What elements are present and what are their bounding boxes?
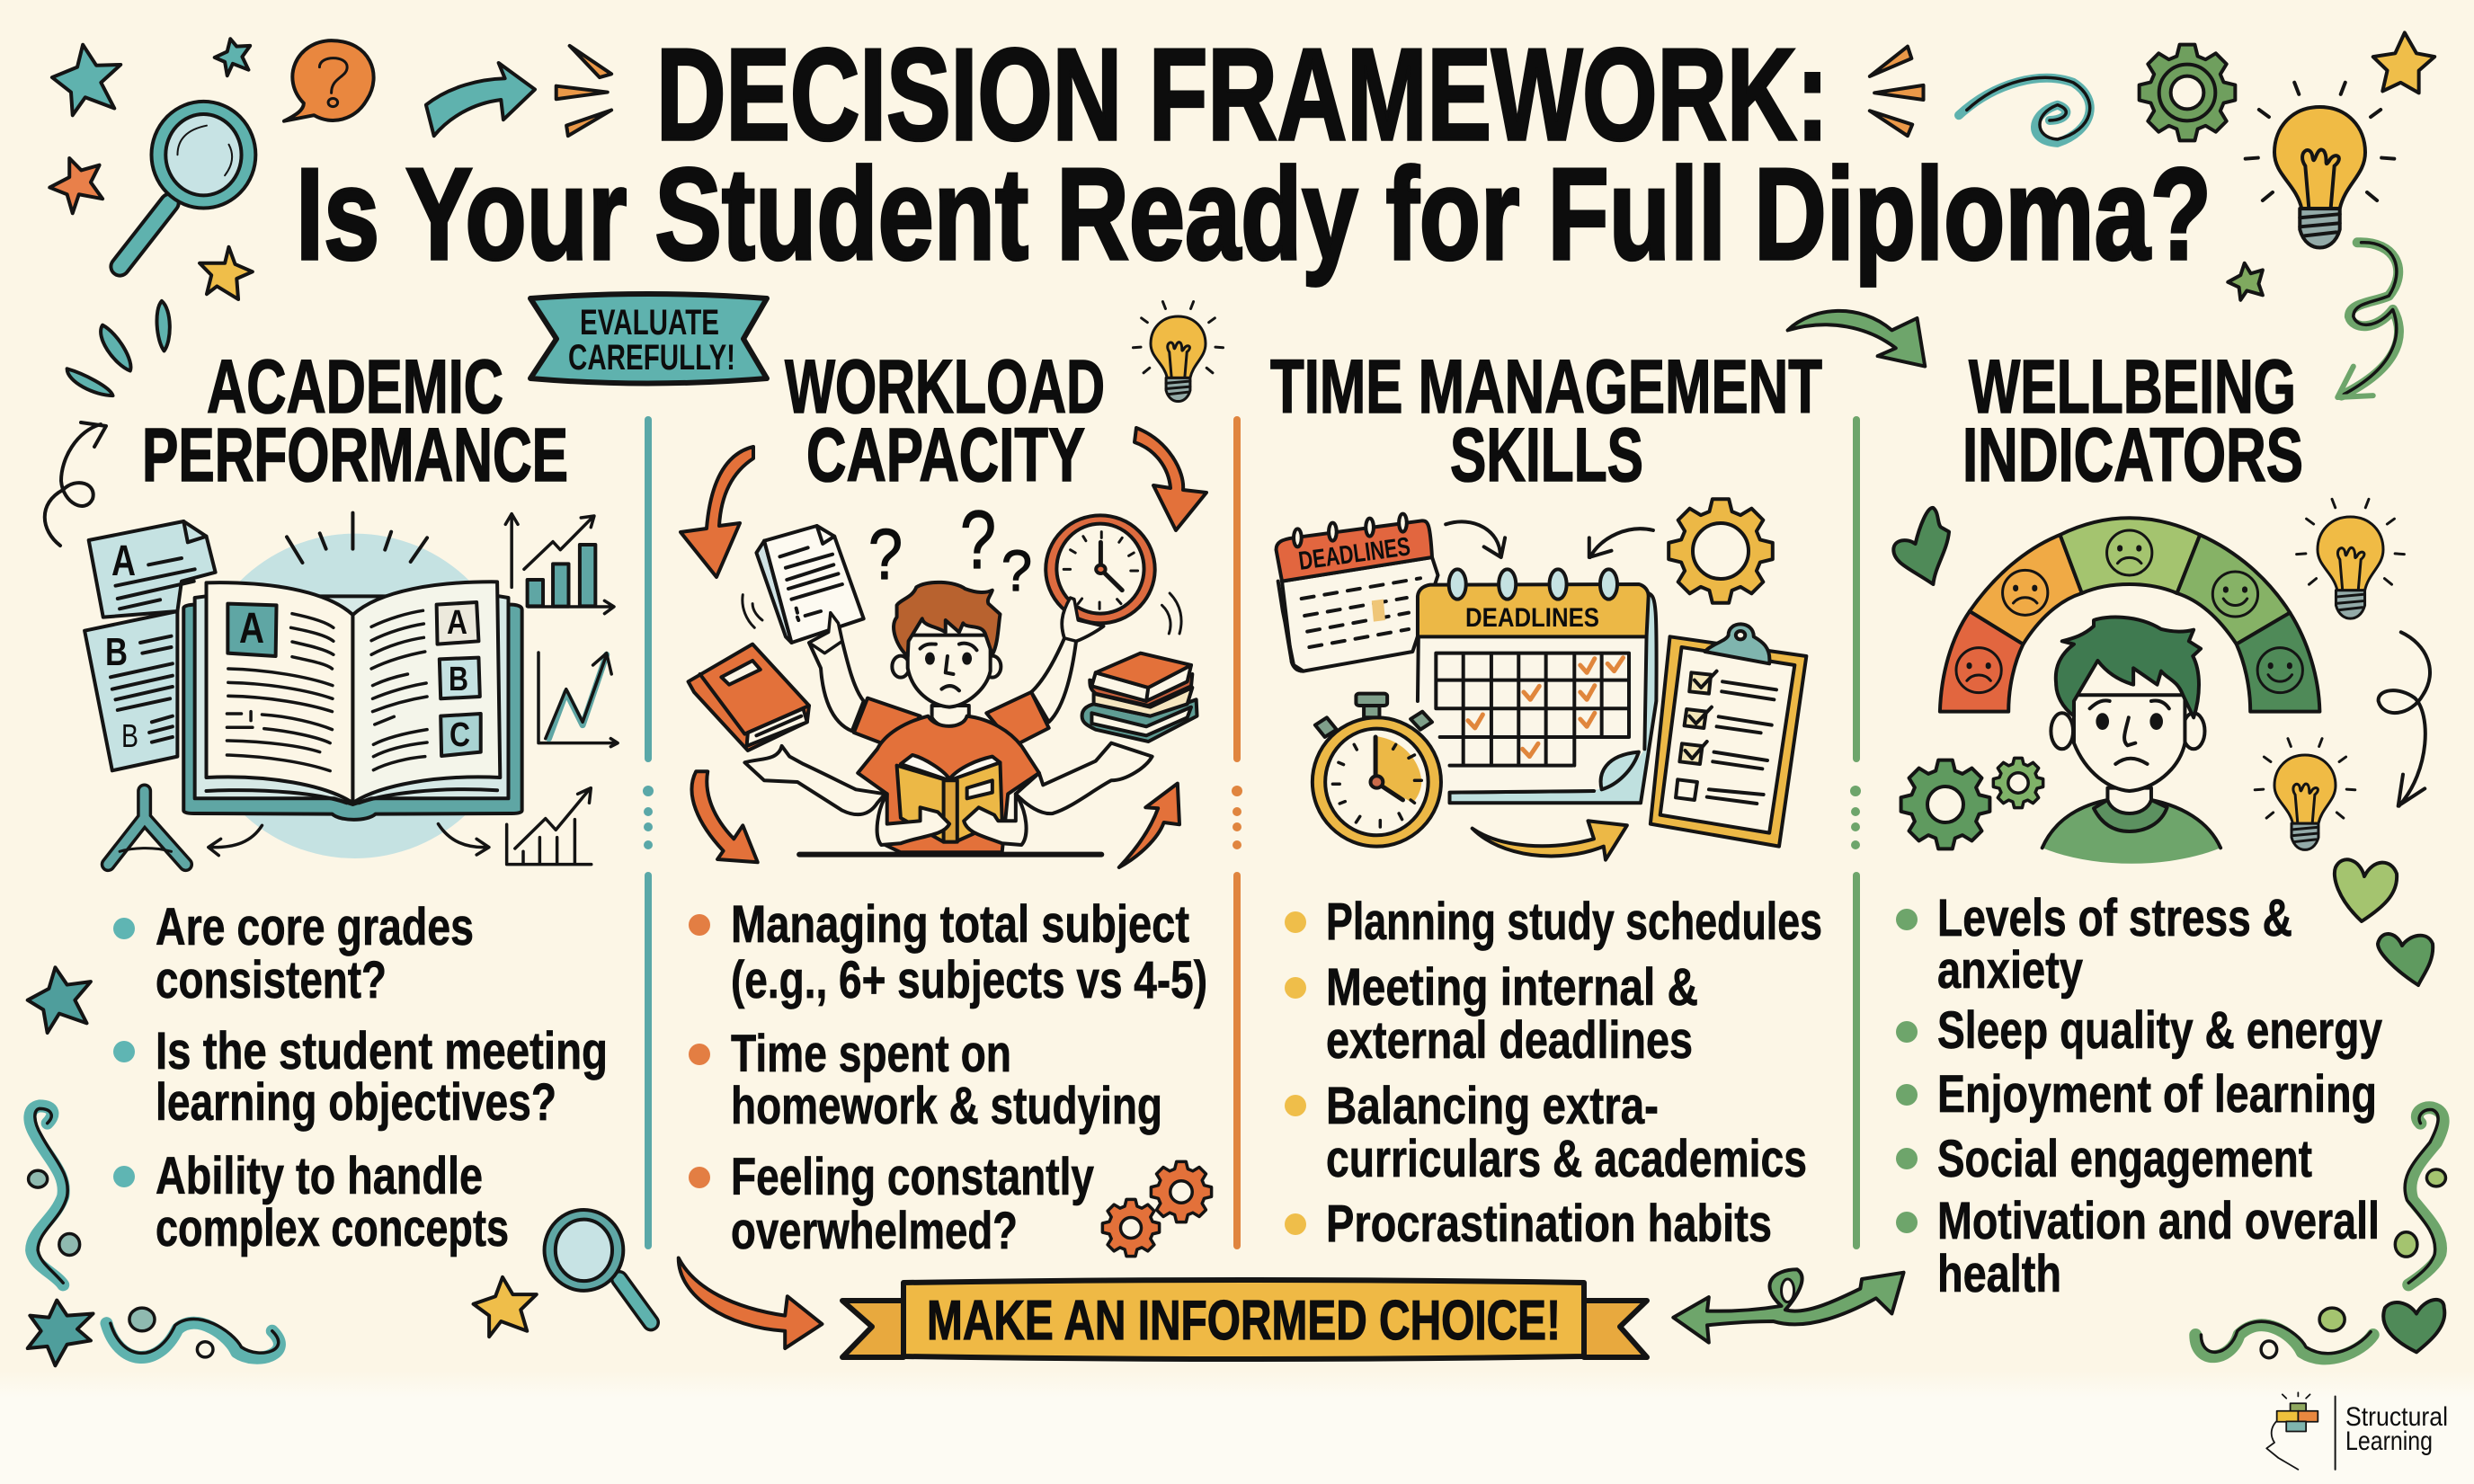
icon: orange gears xyxy=(1102,1161,1212,1257)
heading: time management skills: TIME MANAGEMENT xyxy=(1270,344,1822,429)
list: wellbeing indicators: health xyxy=(1937,1245,2061,1303)
list: wellbeing indicators: Enjoyment of learning xyxy=(1937,1065,2377,1124)
heading: time management skills: SKILLS xyxy=(1450,413,1643,497)
logo: structural learning: Structural xyxy=(2345,1402,2448,1432)
list: academic questions: complex concepts xyxy=(156,1199,509,1257)
heading: academic performance: PERFORMANCE xyxy=(142,413,568,497)
illustration: overwhelmed student juggling xyxy=(681,428,1206,867)
banner: make an informed choice: MAKE AN INFORMED CHOICE! xyxy=(927,1290,1561,1352)
heading: academic performance xyxy=(142,344,568,497)
badge: evaluate carefully: CAREFULLY! xyxy=(568,338,735,378)
column divider: time / wellbeing xyxy=(1850,416,1861,1249)
arrow: green double-headed arrow xyxy=(1673,1269,1904,1343)
list: academic questions: consistent? xyxy=(156,951,387,1009)
list: workload factors: Feeling constantly xyxy=(731,1148,1094,1206)
list: time management items: Meeting internal & xyxy=(1326,958,1698,1017)
list: time management items: Procrastination habits xyxy=(1326,1195,1772,1253)
column divider: academic / workload xyxy=(643,416,654,1249)
heading: workload capacity: WORKLOAD xyxy=(785,344,1105,429)
list: workload factors: (e.g., 6+ subjects vs 4-5) xyxy=(731,951,1207,1009)
list: workload factors: overwhelmed? xyxy=(731,1202,1018,1260)
illustration: calendars, stopwatch, checklist and gear xyxy=(1277,499,1806,860)
column divider: workload / time xyxy=(1232,416,1242,1249)
bottom-left decorations: star, swirls, magnifier xyxy=(28,967,651,1365)
list: wellbeing indicators xyxy=(1896,889,2382,1303)
illustration: open book with grades and charts: A xyxy=(111,538,136,585)
heading: wellbeing indicators: INDICATORS xyxy=(1962,413,2303,497)
list: time management items: external deadlines xyxy=(1326,1011,1693,1070)
panel: wellbeing indicators xyxy=(1788,311,2433,1303)
heading: workload capacity xyxy=(785,344,1105,497)
top-right decorations: spiral, gear, star, bulb, green swirl xyxy=(1870,32,2434,397)
heading: wellbeing indicators: WELLBEING xyxy=(1969,344,2296,429)
list: time management items xyxy=(1285,893,1822,1253)
illustration: open book with grades and charts: B xyxy=(105,630,128,674)
list: workload factors: Time spent on xyxy=(731,1025,1011,1083)
heading: wellbeing indicators xyxy=(1962,344,2303,497)
list: academic questions xyxy=(113,898,608,1257)
illustration: open book with grades and charts xyxy=(85,513,618,865)
panel: academic performance xyxy=(45,301,618,1257)
illustration: overwhelmed student juggling: ? xyxy=(1001,538,1032,603)
heading: workload capacity: CAPACITY xyxy=(806,413,1085,497)
banner: make an informed choice xyxy=(842,1280,1647,1359)
icon: hearts xyxy=(2335,859,2433,985)
badge: evaluate carefully xyxy=(530,294,767,383)
badge: evaluate carefully: EVALUATE xyxy=(580,303,719,342)
list: academic questions: Ability to handle xyxy=(156,1147,483,1205)
list: time management items: curriculars & academics xyxy=(1326,1130,1807,1188)
title: DECISION FRAMEWORK: xyxy=(656,22,1829,167)
illustration: calendars, stopwatch, checklist and gear: DEADLINES xyxy=(1297,532,1412,576)
list: wellbeing indicators: Social engagement xyxy=(1937,1130,2312,1188)
list: workload factors xyxy=(689,895,1207,1260)
heading: academic performance: ACADEMIC xyxy=(207,344,503,429)
list: academic questions: Is the student meeting xyxy=(156,1022,608,1080)
panel: workload capacity xyxy=(681,302,1224,1260)
illustration: overwhelmed student juggling: ? xyxy=(868,514,903,594)
illustration: overwhelmed student juggling: ? xyxy=(960,494,996,586)
logo: structural learning: Learning xyxy=(2345,1426,2433,1456)
list: workload factors: Managing total subject xyxy=(731,895,1189,954)
title xyxy=(296,22,2211,287)
list: wellbeing indicators: anxiety xyxy=(1937,941,2083,1000)
illustration: open book with grades and charts: C xyxy=(449,716,470,754)
arrow: orange arrow to banner xyxy=(679,1257,822,1348)
list: time management items: Balancing extra- xyxy=(1326,1077,1659,1135)
illustration: calendars, stopwatch, checklist and gear: DEADLINES xyxy=(1465,603,1599,633)
illustration: open book with grades and charts: A xyxy=(447,604,467,642)
heading: time management skills xyxy=(1270,344,1822,497)
top-left decorations: stars, magnifier, question bubble, arrow xyxy=(49,39,611,299)
list: time management items: Planning study schedules xyxy=(1326,893,1822,951)
logo: structural learning xyxy=(2266,1392,2448,1470)
list: academic questions: Are core grades xyxy=(156,898,474,956)
illustration: open book with grades and charts: B xyxy=(449,661,468,698)
list: wellbeing indicators: Motivation and overall xyxy=(1937,1192,2380,1250)
decoration: leaf dashes and curly arrow xyxy=(45,301,170,546)
icon: small light bulb xyxy=(1133,302,1224,402)
illustration: open book with grades and charts: B xyxy=(121,717,138,754)
illustration: mood gauge and worried student xyxy=(1893,499,2430,864)
panel: time management skills xyxy=(1270,344,1822,1253)
bottom-right decorations: swirls and heart xyxy=(2195,1107,2445,1358)
arrow: green curved arrow to wellbeing xyxy=(1788,311,1925,367)
illustration: open book with grades and charts: A xyxy=(239,605,264,653)
list: wellbeing indicators: Levels of stress & xyxy=(1937,889,2292,947)
list: workload factors: homework & studying xyxy=(731,1077,1162,1135)
list: academic questions: learning objectives? xyxy=(156,1073,556,1132)
